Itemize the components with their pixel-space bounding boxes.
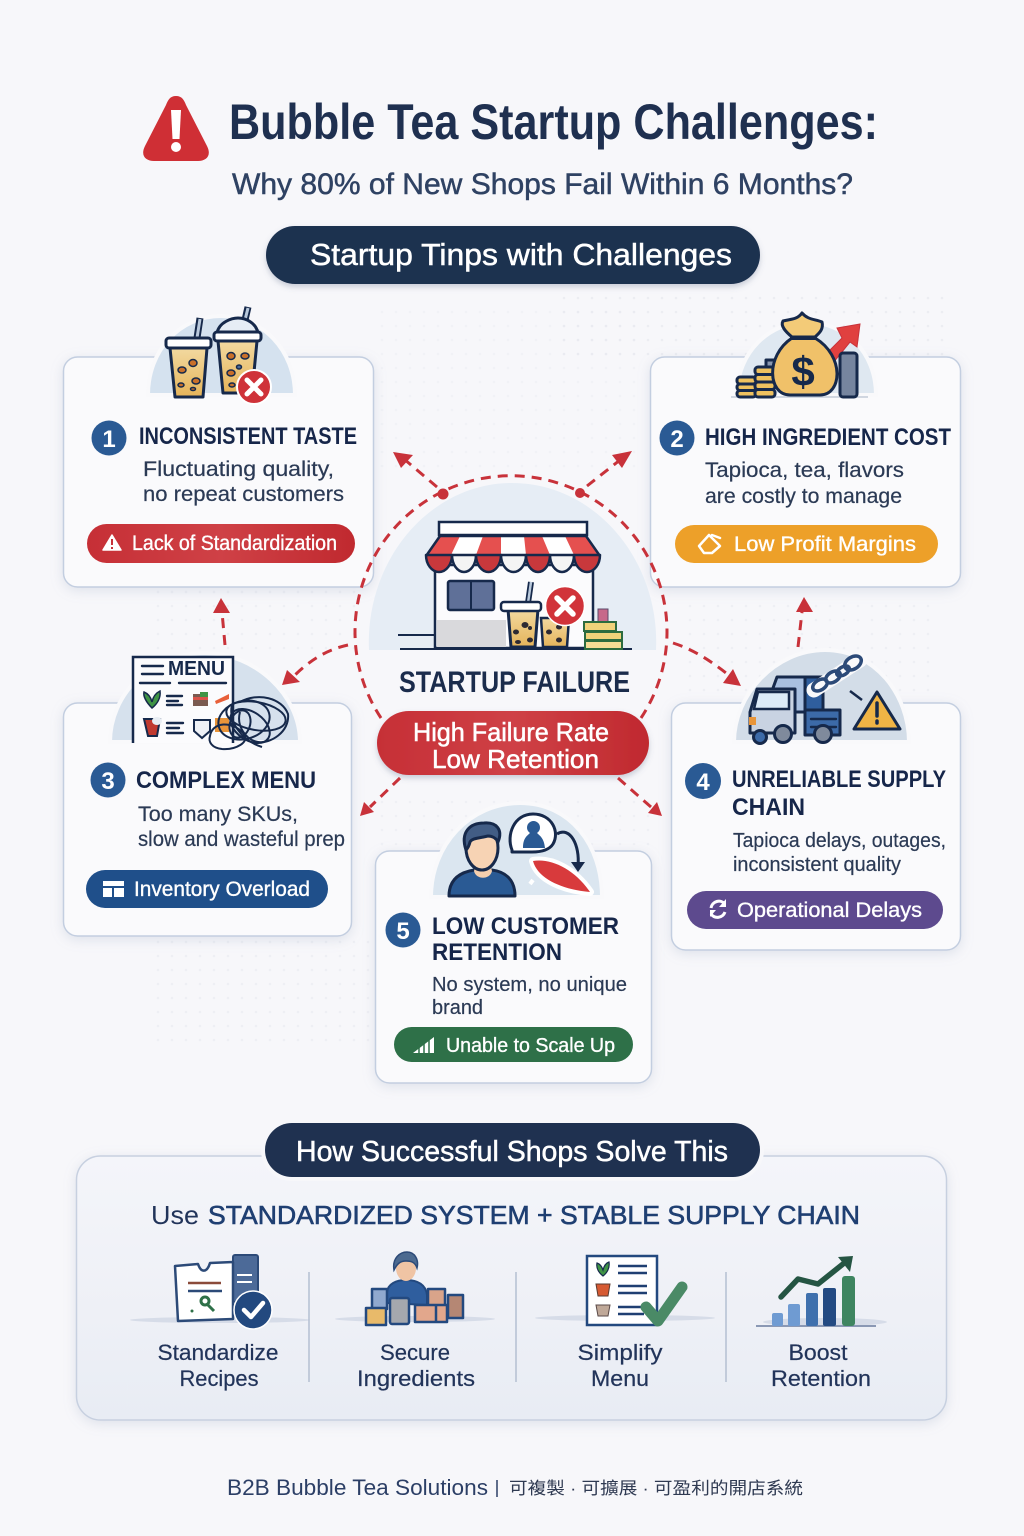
number badge 4: 4 (696, 769, 710, 796)
text: description (143, 458, 344, 506)
label: Ingredients (357, 1366, 475, 1391)
heading: low customer retention (432, 913, 619, 966)
tag: inventory overload: Inventory Overload (134, 878, 310, 901)
text: description: Tapioca delays, outages, (733, 830, 946, 852)
icon: customer leaving (431, 803, 602, 897)
icon: money bag with arrow (731, 313, 876, 397)
label (578, 1340, 662, 1391)
icon: closed shop (369, 483, 656, 650)
dashed ring (355, 476, 667, 718)
tag: lack of standardization (87, 524, 355, 563)
number badge 5 (386, 912, 420, 948)
central hub: startup failure (355, 476, 667, 775)
icon: bubble tea cups with X (148, 307, 295, 404)
arrow: hub to card 1 (393, 452, 437, 487)
banner: startup tips: Startup Tinps with Challenges (310, 237, 732, 272)
subheading: use standardized system and stable supply chain: Use (151, 1200, 199, 1230)
heading: high ingredient cost: HIGH INGREDIENT COST (705, 424, 951, 451)
text: description: are costly to manage (705, 485, 902, 508)
label: Simplify (578, 1340, 662, 1365)
item: simplify menu (578, 1256, 682, 1391)
panel: card 5 low customer retention (376, 803, 652, 1083)
heading: low customer retention: RETENTION (432, 939, 562, 966)
footer: 可複製 · 可擴展 · 可盈利的開店系統 (509, 1479, 803, 1498)
text: description (733, 830, 946, 876)
number badge 4 (685, 763, 721, 799)
tag: high failure rate, low retention: Low Retention (432, 744, 599, 774)
tag: unable to scale up: Unable to Scale Up (446, 1035, 615, 1057)
number badge 1 (92, 420, 126, 456)
title: Bubble Tea Startup Challenges: (229, 94, 878, 150)
label: Boost (788, 1340, 848, 1365)
number badge 2 (660, 420, 694, 456)
arrow: hub to card 2 (587, 451, 632, 486)
icon: tangled menu (110, 653, 300, 750)
tag: lack of standardization: Lack of Standardization (132, 532, 337, 555)
number badge 1: 1 (102, 426, 116, 453)
number badge 3: 3 (101, 768, 115, 795)
arrow: card 4 to card 2 (796, 597, 813, 647)
text: description: brand (432, 997, 483, 1019)
panel: card 3 complex menu (64, 653, 352, 936)
heading: low customer retention: LOW CUSTOMER (432, 913, 619, 940)
panel: card 1 inconsistent taste (64, 307, 374, 587)
heading: complex menu: COMPLEX MENU (136, 767, 316, 794)
arrow: hub to card 3 lower (360, 778, 400, 816)
text: description (432, 974, 627, 1019)
tag: inventory overload (86, 870, 328, 908)
tag: operational delays: Operational Delays (737, 899, 922, 922)
banner: solve this: How Successful Shops Solve This (296, 1136, 728, 1168)
tag: operational delays (687, 891, 943, 929)
icon: truck, broken chain and warning (734, 650, 909, 744)
heading: inconsistent taste: INCONSISTENT TASTE (139, 423, 357, 450)
footer: B2B Bubble Tea Solutions (227, 1475, 488, 1500)
label (771, 1340, 871, 1391)
label: Menu (591, 1366, 649, 1391)
text: description: no repeat customers (143, 483, 344, 506)
icon: warning triangle (143, 96, 209, 161)
tag: low profit margins (675, 525, 938, 563)
label: Secure (380, 1340, 450, 1365)
arrow: hub to card 4 (673, 643, 741, 686)
text: description: inconsistent quality (733, 854, 901, 876)
number badge 5: 5 (396, 918, 410, 945)
label (357, 1340, 475, 1391)
number badge 3 (90, 762, 126, 798)
number badge 2: 2 (670, 426, 684, 453)
tag: high failure rate, low retention: High Failure Rate (413, 717, 609, 747)
text: description (138, 803, 345, 851)
arrow: hub to card 3 (282, 645, 348, 685)
label: Standardize (158, 1340, 278, 1365)
text: description: slow and wasteful prep (138, 828, 345, 851)
label: Retention (771, 1366, 871, 1391)
icon: tangled menu: MENU (168, 658, 225, 680)
heading: unreliable supply chain: UNRELIABLE SUPPLY (732, 766, 946, 793)
panel: how successful shops solve this (76, 1123, 946, 1420)
label: Recipes (180, 1366, 258, 1391)
banner: solve this (265, 1123, 760, 1177)
subtitle: Why 80% of New Shops Fail Within 6 Months? (232, 168, 853, 201)
arrow: hub to card 5 (618, 778, 662, 816)
panel: card 2 high ingredient cost (650, 313, 960, 587)
banner: startup tips (266, 226, 760, 284)
label (158, 1340, 278, 1391)
item: standardize recipes (158, 1255, 278, 1391)
text: description (705, 459, 904, 508)
footer (227, 1475, 803, 1500)
text: description: Tapioca, tea, flavors (705, 459, 904, 482)
item: secure ingredients (357, 1252, 475, 1391)
icon: checklist (587, 1256, 682, 1325)
heading: unreliable supply chain: CHAIN (732, 794, 805, 821)
heading: unreliable supply chain (732, 766, 946, 821)
icon: money bag with arrow: $ (791, 348, 815, 395)
tag: high failure rate, low retention (377, 711, 649, 775)
text: description: Too many SKUs, (138, 803, 298, 826)
subheading: use standardized system and stable supply chain: STANDARDIZED SYSTEM + STABLE SUPPLY CHAIN (208, 1200, 860, 1230)
heading: startup failure: STARTUP FAILURE (399, 666, 630, 699)
icon: recipe card (175, 1255, 272, 1329)
arrow: card 3 to card 1 (213, 598, 230, 645)
icon: person with boxes (366, 1252, 463, 1325)
tag: low profit margins: Low Profit Margins (734, 533, 916, 556)
text: description: Fluctuating quality, (143, 458, 334, 481)
item: boost retention (756, 1256, 876, 1391)
tag: unable to scale up (394, 1027, 633, 1062)
panel: card 4 unreliable supply chain (672, 650, 960, 950)
icon: rising bar chart (756, 1256, 876, 1326)
text: description: No system, no unique (432, 974, 627, 996)
